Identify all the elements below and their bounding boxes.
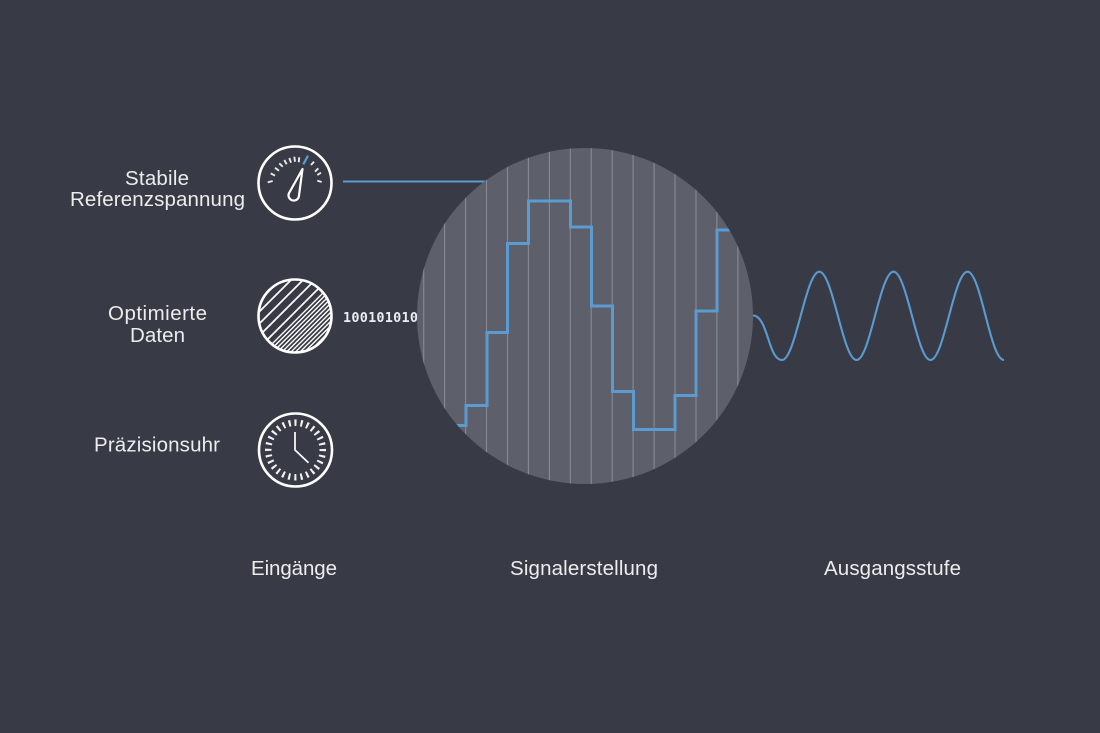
connector line from gauge to circle [343,180,486,182]
icon: clock [259,414,332,486]
label: Optimierte Daten [108,302,207,347]
stepped signal [450,201,735,430]
panel: magnifying circle with stepped signal [417,140,753,490]
label: Präzisionsuhr: Präzisionsuhr [94,434,220,456]
column heading: Signalerstellung: Signalerstellung [510,557,658,580]
label: Optimierte Daten: Optimierte [108,302,207,325]
column heading: Ausgangsstufe: Ausgangsstufe [824,557,961,580]
label: Stabile Referenzspannung: Referenzspannung [70,188,245,211]
label: Optimierte Daten: Daten [130,324,185,347]
column heading: Eingänge: Eingänge [251,557,337,580]
infographic [72,145,1004,579]
binary data text: 100101010 [343,310,418,326]
output sine wave [753,272,1004,360]
icon: hatched circle [257,278,333,354]
label: Stabile Referenzspannung: Stabile [125,167,189,190]
label: Stabile Referenzspannung [70,167,245,211]
icon: gauge [258,146,332,220]
